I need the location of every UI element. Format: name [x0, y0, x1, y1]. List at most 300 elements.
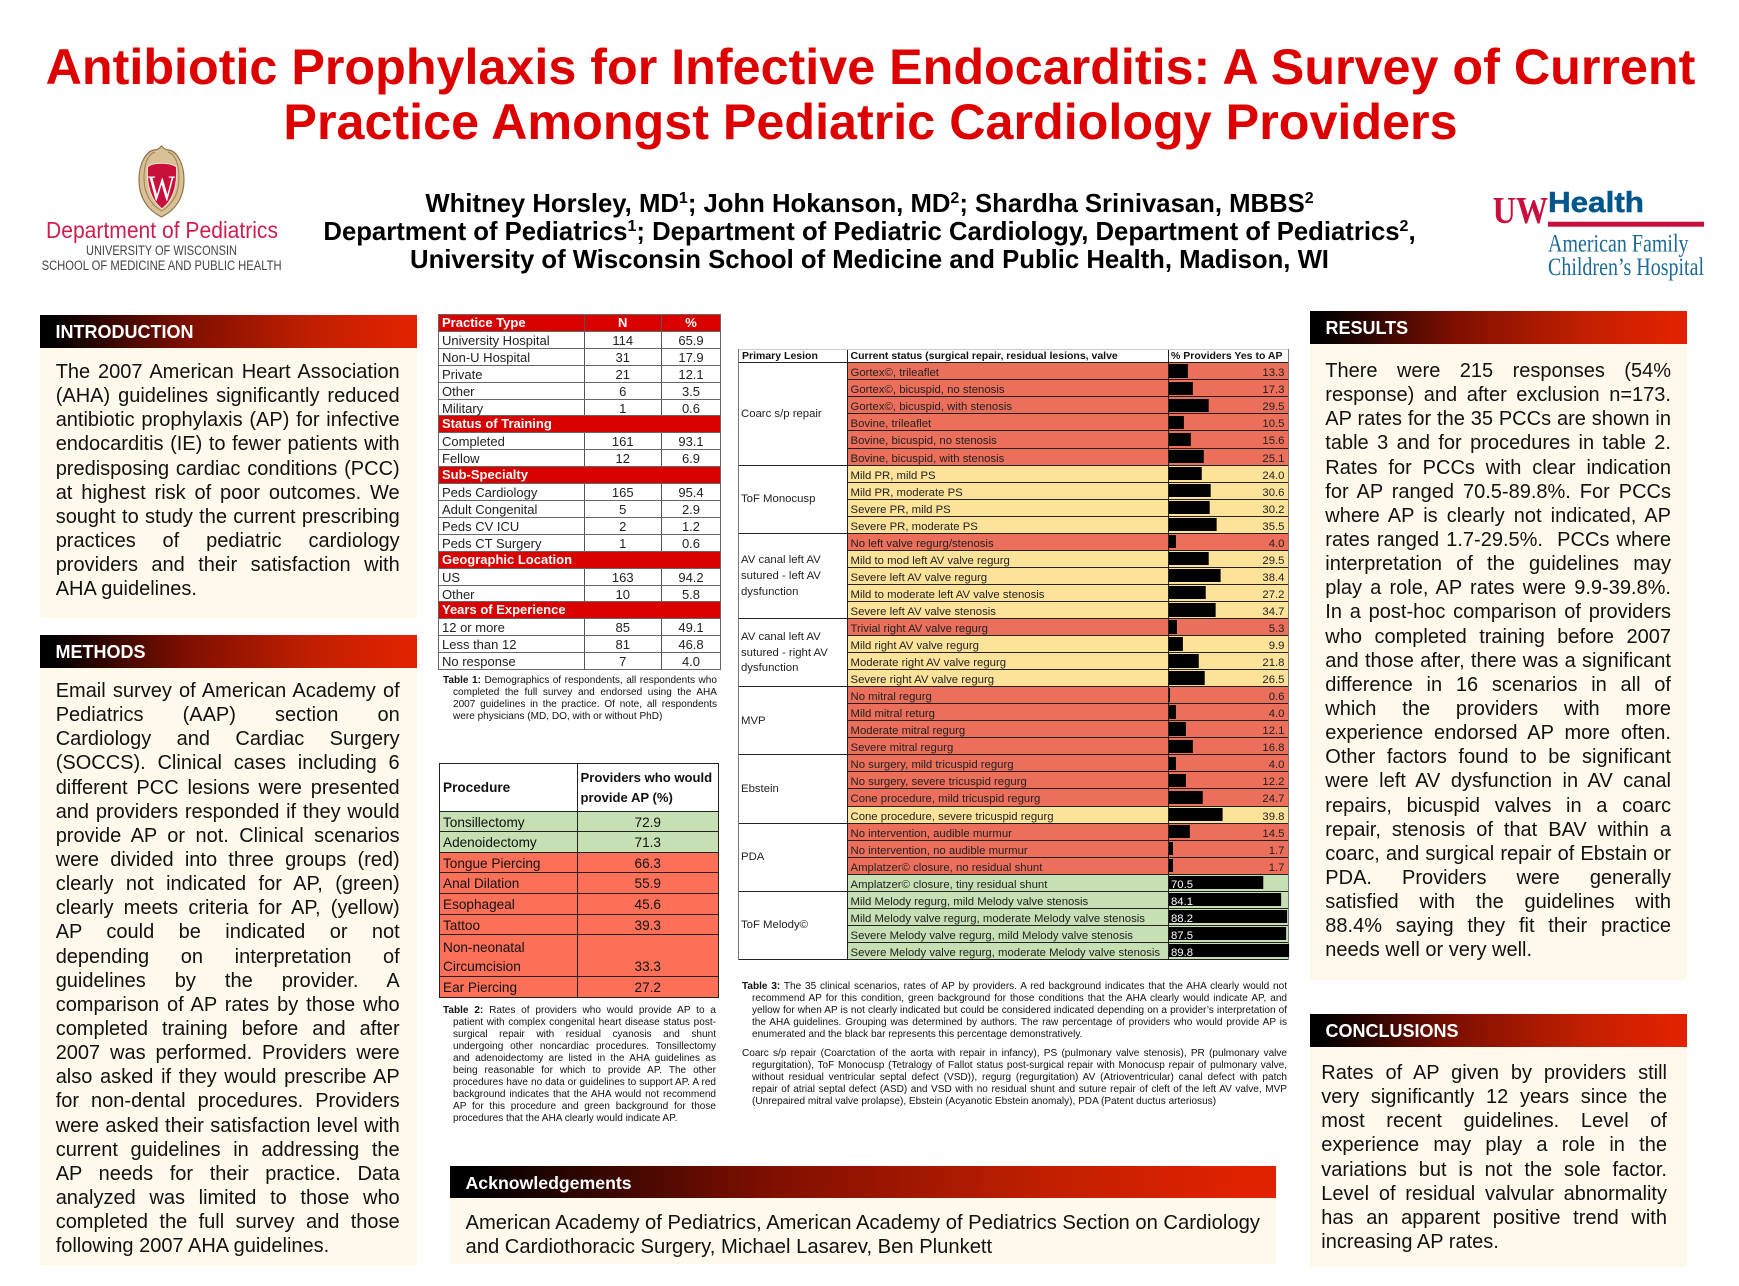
- table 3 abbreviations: repair of atrial septal defect (ASD) and VSD with no residual shunt and suture repair of cleft of the left AV valve, MVP: [752, 1084, 1287, 1095]
- section row: geographic location: [439, 552, 720, 569]
- section row: years of experience: Years of Experience: [442, 602, 566, 617]
- text: results: satisfied with the guidelines with: [1325, 891, 1671, 913]
- section row: years of experience: [439, 602, 720, 619]
- text: introduction: providers and their satisfaction with: [56, 554, 400, 576]
- panel: introduction: [40, 315, 417, 618]
- text: methods: clearly meets criteria for AP, (yellow): [56, 897, 400, 919]
- text: methods: also asked if they would prescribe AP: [56, 1066, 400, 1088]
- table 1: demographics: Peds CV ICU: [442, 519, 519, 534]
- text: methods: for non-dental procedures. Providers: [56, 1090, 400, 1112]
- table 1: demographics: 21: [616, 367, 630, 382]
- group: ToF Monocusp: Severe PR, moderate PS: [850, 521, 978, 533]
- text: methods: [56, 680, 400, 1257]
- text: results: were left AV dysfunction in AV canal: [1325, 770, 1671, 792]
- group: PDA: No intervention, audible murmur: [850, 828, 1012, 840]
- group: Ebstein: 4.0: [1269, 759, 1284, 771]
- title: Practice Amongst Pediatric Cardiology Providers: [283, 93, 1458, 150]
- logo: department of pediatrics: [42, 145, 282, 273]
- table 1: demographics: 1: [619, 401, 626, 416]
- text: conclusions: experience may play a role in the: [1321, 1134, 1667, 1156]
- group: AV canal left AV dysfunction: 29.5: [1262, 555, 1284, 567]
- group: ToF Melody: 89.8: [1171, 947, 1193, 959]
- text: results: [1325, 360, 1671, 961]
- table 1: demographics: 5: [619, 502, 626, 517]
- group: ToF Monocusp: [739, 466, 1288, 534]
- table 1: demographics: Other: [442, 384, 475, 399]
- table 1: demographics: 12.1: [678, 367, 704, 382]
- text: introduction: practices of pediatric cardiology: [56, 530, 400, 552]
- group: ToF Melody: 87.5: [1171, 930, 1193, 942]
- table 1: demographics: US: [442, 570, 460, 585]
- text: results: interpretation of the guidelines may: [1325, 553, 1671, 575]
- table 2 caption: Table 2: Rates of providers who would provide AP to a: [443, 1005, 716, 1016]
- text: results: AP rates for the 35 PCCs are shown in: [1325, 408, 1671, 430]
- text: results: response) and after exclusion n=173.: [1325, 384, 1671, 406]
- text: results: coarc, and surgical repair of Ebstain or: [1325, 843, 1671, 865]
- group: PDA: 1.7: [1269, 862, 1284, 874]
- table 1 header row: [439, 315, 720, 332]
- section row: geographic location: Geographic Location: [442, 552, 572, 567]
- text: methods: different PCC lesions were presented: [56, 777, 400, 799]
- text: methods: 2007 was performed. Providers were: [56, 1042, 400, 1064]
- table 3 header row: Current status (surgical repair, residual lesions, valve: [850, 350, 1118, 362]
- table 1: demographics: 5.8: [682, 586, 700, 602]
- group: Ebstein: Ebstein: [741, 783, 779, 795]
- text: methods: analyzed was limited to those who: [56, 1187, 400, 1209]
- table 3 header row: % Providers Yes to AP: [1171, 350, 1282, 362]
- group: ToF Melody: ToF Melody©: [741, 919, 808, 931]
- text: methods: Email survey of American Academy of: [56, 680, 400, 702]
- text: results: 88.4% saying they fit their practice: [1325, 915, 1671, 937]
- table 3 header row: [739, 349, 1288, 363]
- table 1: demographics: 2.9: [682, 502, 700, 517]
- heading: acknowledgements: Acknowledgements: [466, 1173, 632, 1193]
- group: AV canal right AV dysfunction: 21.8: [1262, 657, 1284, 669]
- text: conclusions: most recent guidelines. Level of: [1321, 1110, 1667, 1132]
- table 3 abbreviations: regurgitation), ToF Monocusp (Tetralogy of Fallot status post-surgical repair with Monocusp repair of pulmonary valve,: [752, 1060, 1287, 1071]
- group: ToF Melody: Severe Melody valve regurg, mild Melody valve stenosis: [850, 930, 1133, 942]
- group: Coarc s/p repair: 25.1: [1262, 453, 1284, 465]
- icon: crest: W: [148, 168, 175, 208]
- table 2: procedures: 33.3: [635, 959, 661, 974]
- group: AV canal right AV dysfunction: 5.3: [1269, 623, 1284, 635]
- table 3 abbreviations: without residual ventricular septal defect (VSD)), regurg (regurgitation) AV (Atrioventricular) canal defect with patch: [752, 1072, 1287, 1083]
- table 2: procedures: 45.6: [635, 897, 661, 912]
- text: introduction: predisposing cardiac conditions (PCC): [56, 458, 400, 480]
- table 1: demographics: 3.5: [682, 384, 700, 399]
- group: Coarc s/p repair: Bovine, trileaflet: [850, 418, 931, 430]
- table 3 caption: yellow for when AP is not clearly indicated but could be considered indicated depending on a provider’s interpretation of: [752, 1005, 1287, 1016]
- text: introduction: endocarditis (IE) to fewer patients with: [56, 433, 400, 455]
- text: introduction: [56, 361, 400, 600]
- group: Coarc s/p repair: Coarc s/p repair: [741, 408, 822, 420]
- group: Coarc s/p repair: 13.3: [1262, 367, 1284, 379]
- group: AV canal left AV dysfunction: 4.0: [1269, 538, 1284, 550]
- table 1 caption: Table 1: Demographics of respondents, all respondents who: [443, 675, 717, 686]
- table 2 header row: [440, 764, 718, 812]
- table 2: procedures: Adenoidectomy: [443, 835, 537, 850]
- text: methods: were asked their satisfaction level with: [56, 1115, 400, 1137]
- text: methods: clearly not indicated for AP, (green): [56, 873, 400, 895]
- heading: methods: METHODS: [56, 642, 146, 662]
- table 3 caption: enumerated and the black bar represents this percentage demonstratively.: [752, 1029, 1082, 1040]
- group: PDA: Amplatzer© closure, no residual shunt: [850, 862, 1042, 874]
- text: results: for AP ranged 70.5-89.8%. For PCCs: [1325, 481, 1671, 503]
- table 1: demographics: Military: [442, 401, 483, 416]
- table 2: procedures: Tattoo: [443, 918, 480, 933]
- group: PDA: No intervention, no audible murmur: [850, 845, 1028, 857]
- title: Antibiotic Prophylaxis for Infective Endocarditis: A Survey of Current: [46, 38, 1695, 95]
- table 2: procedures: [439, 763, 719, 998]
- table 3 caption: Table 3: The 35 clinical scenarios, rates of AP by providers. A red background indicates that the AHA clearly would not: [742, 981, 1287, 992]
- group: AV canal left AV dysfunction: Severe left AV valve stenosis: [850, 606, 996, 618]
- heading: introduction: [40, 315, 417, 348]
- group: AV canal left AV dysfunction: 27.2: [1262, 589, 1284, 601]
- group: Ebstein: No surgery, severe tricuspid regurg: [850, 776, 1027, 788]
- group: Coarc s/p repair: Gortex©, bicuspid, with stenosis: [850, 401, 1012, 413]
- text: results: There were 215 responses (54%: [1325, 360, 1671, 382]
- group: Coarc s/p repair: 10.5: [1262, 418, 1284, 430]
- text: results: In a post-hoc comparison of providers: [1325, 601, 1671, 623]
- group: MVP: 16.8: [1262, 742, 1284, 754]
- table 1: demographics: 10: [616, 586, 630, 602]
- table 1: demographics: 12 or more: [442, 620, 505, 635]
- group: PDA: Amplatzer© closure, tiny residual shunt: [850, 879, 1047, 891]
- group: PDA: [739, 824, 1288, 892]
- text: introduction: antibiotic prophylaxis (AP) for infective: [56, 409, 400, 431]
- table 1: demographics: Less than 12: [442, 637, 516, 652]
- text: methods: provide AP or not. Clinical scenarios: [56, 825, 400, 847]
- group: PDA: 14.5: [1262, 828, 1284, 840]
- heading: results: RESULTS: [1326, 318, 1408, 338]
- table 1: demographics: 12: [616, 451, 630, 466]
- heading: results: [1310, 311, 1687, 344]
- table 2: procedures: Ear Piercing: [443, 980, 517, 995]
- text: methods: AP could be indicated or not: [56, 921, 400, 943]
- group: ToF Melody: Mild Melody valve regurg, moderate Melody valve stenosis: [850, 913, 1145, 925]
- group: Ebstein: Cone procedure, mild tricuspid regurg: [850, 793, 1040, 805]
- table 1: demographics: 93.1: [678, 434, 704, 449]
- table 1: demographics: 1.2: [682, 519, 700, 534]
- group: ToF Melody: 84.1: [1171, 896, 1193, 908]
- group: AV canal left AV dysfunction: 34.7: [1262, 606, 1284, 618]
- group: Coarc s/p repair: Gortex©, trileaflet: [850, 367, 939, 379]
- text: results: PDA. Providers were generally: [1325, 867, 1671, 889]
- table 2 caption: procedures that the AHA clearly would indicate AP.: [453, 1113, 677, 1124]
- group: MVP: Moderate mitral regurg: [850, 725, 965, 737]
- group: Coarc s/p repair: 17.3: [1262, 384, 1284, 396]
- text: methods: Pediatrics (AAP) section on: [56, 704, 400, 726]
- table 1 caption: completed the full survey and endorsed using the AHA: [453, 687, 717, 698]
- text: results: repair, stenosis of that BAV within a: [1325, 819, 1671, 841]
- text: methods: guidelines by the provider. A: [56, 970, 400, 992]
- table 1: demographics: 161: [612, 434, 634, 449]
- group: AV canal right AV dysfunction: Trivial right AV valve regurg: [850, 623, 988, 635]
- text: introduction: The 2007 American Heart Association: [56, 361, 400, 383]
- group: ToF Monocusp: 24.0: [1262, 470, 1284, 482]
- group: ToF Monocusp: Mild PR, mild PS: [850, 470, 936, 482]
- text: results: Other factors found to be significant: [1325, 746, 1671, 768]
- table 2: procedures: 66.3: [635, 856, 661, 870]
- group: ToF Monocusp: ToF Monocusp: [741, 493, 815, 505]
- table 1: demographics: No response: [442, 654, 516, 669]
- group: MVP: [739, 687, 1288, 755]
- section row: status of training: Status of Training: [442, 416, 552, 431]
- group: AV canal left AV dysfunction: No left valve regurg/stenosis: [850, 538, 994, 550]
- group: Coarc s/p repair: [739, 363, 1288, 466]
- text: conclusions: has an apparent positive trend with: [1321, 1207, 1667, 1229]
- section row: sub-specialty: [439, 467, 720, 484]
- table 1: demographics: 85: [616, 620, 630, 635]
- table 2: procedures: 27.2: [635, 980, 661, 995]
- table 1: demographics: 0.6: [682, 401, 700, 416]
- group: ToF Monocusp: Severe PR, mild PS: [850, 504, 951, 516]
- authors and affiliations: Department of Pediatrics1; Department of Pediatric Cardiology, Department of Pediatrics2,: [323, 218, 1416, 246]
- group: AV canal right AV dysfunction: AV canal left AV sutured - right AV dysfunction: [741, 631, 828, 674]
- group: AV canal left AV dysfunction: AV canal left AV sutured - left AV dysfunction: [741, 554, 821, 598]
- table 2: procedures: 55.9: [635, 876, 661, 891]
- group: ToF Melody: 88.2: [1171, 913, 1193, 925]
- group: AV canal left AV dysfunction: Mild to mod left AV valve regurg: [850, 555, 1010, 567]
- text: methods: completed training before and after: [56, 1018, 400, 1040]
- text: methods: completed the full survey and those: [56, 1211, 400, 1233]
- group: AV canal left AV dysfunction: Severe left AV valve regurg: [850, 572, 987, 584]
- group: MVP: 4.0: [1269, 708, 1284, 720]
- heading: methods: [40, 635, 417, 668]
- table 2: procedures: Non-neonatal Circumcision: [443, 940, 525, 974]
- group: AV canal right AV dysfunction: 26.5: [1262, 674, 1284, 686]
- group: Coarc s/p repair: 15.6: [1262, 435, 1284, 447]
- title: [46, 38, 1695, 150]
- table 1: demographics: Adult Congenital: [442, 502, 537, 517]
- group: Ebstein: 24.7: [1262, 793, 1284, 805]
- text: results: and those after, there was a significant: [1325, 650, 1671, 672]
- table 2: procedures: 39.3: [635, 918, 661, 933]
- text: conclusions: Rates of AP given by providers still: [1321, 1062, 1667, 1084]
- table 1: demographics: Peds Cardiology: [442, 485, 537, 500]
- table 2 caption: procedures have no data or guidelines to support AP. A red: [453, 1077, 716, 1088]
- table 1: demographics: 7: [619, 654, 626, 669]
- text: acknowledgements: and Cardiothoracic Surgery, Michael Lasarev, Ben Plunkett: [466, 1236, 992, 1258]
- text: results: which the providers with more: [1325, 698, 1671, 720]
- group: PDA: 1.7: [1269, 845, 1284, 857]
- table 1: demographics: 49.1: [678, 620, 704, 635]
- section row: status of training: [439, 416, 720, 433]
- table 3 abbreviations: (Unrepaired mitral valve prolapse), Ebstein (Acyanotic Ebstein anomaly), PDA (Patent ductus arteriosus): [752, 1096, 1216, 1107]
- table 1 caption: were physicians (MD, DO, with or without PhD): [453, 711, 662, 722]
- table 1: demographics: 163: [612, 570, 634, 585]
- table 2: procedures: 72.9: [635, 814, 661, 830]
- table 1: demographics: 65.9: [678, 333, 704, 348]
- text: methods: current guidelines in addressing the: [56, 1139, 400, 1161]
- group: PDA: PDA: [741, 851, 764, 863]
- text: introduction: sought to study the current prescribing: [56, 506, 400, 528]
- group: MVP: Mild mitral returg: [850, 708, 935, 720]
- text: results: table 3 and for procedures in table 2.: [1325, 432, 1671, 454]
- group: MVP: 12.1: [1262, 725, 1284, 737]
- group: Coarc s/p repair: Gortex©, bicuspid, no stenosis: [850, 384, 1005, 396]
- group: AV canal right AV dysfunction: 9.9: [1269, 640, 1284, 652]
- table 1: demographics: 1: [619, 536, 626, 551]
- text: methods: depending on interpretation of: [56, 946, 400, 968]
- group: Coarc s/p repair: 29.5: [1262, 401, 1284, 413]
- table 1: demographics: University Hospital: [442, 333, 550, 348]
- table 1: demographics: 6: [619, 384, 626, 399]
- authors and affiliations: Whitney Horsley, MD1; John Hokanson, MD2; Shardha Srinivasan, MBBS2: [425, 190, 1314, 218]
- group: MVP: 0.6: [1269, 691, 1284, 703]
- text: results: difference in 16 scenarios in all of: [1325, 674, 1671, 696]
- group: AV canal left AV dysfunction: Mild to moderate left AV valve stenosis: [850, 589, 1044, 601]
- group: MVP: Severe mitral regurg: [850, 742, 953, 754]
- red rule: [1548, 222, 1704, 227]
- table 1 header row: Practice Type: [442, 315, 526, 330]
- authors and affiliations: [323, 190, 1416, 274]
- table 1: demographics: 4.0: [682, 654, 700, 669]
- table 1: demographics: Completed: [442, 434, 505, 449]
- group: AV canal right AV dysfunction: Mild right AV valve regurg: [850, 640, 979, 652]
- table 1: demographics: Non-U Hospital: [442, 350, 530, 365]
- table 3 caption: recommend AP for this condition, green background for those conditions that the AHA clearly would indicate AP, and: [752, 993, 1287, 1004]
- group: ToF Melody: [739, 892, 1288, 960]
- group: ToF Monocusp: Mild PR, moderate PS: [850, 487, 963, 499]
- group: AV canal right AV dysfunction: [739, 619, 1288, 687]
- table 1: demographics: 95.4: [678, 485, 704, 500]
- group: Ebstein: 39.8: [1262, 811, 1284, 823]
- table 3 abbreviations: Coarc s/p repair (Coarctation of the aorta with repair in infancy), PS (pulmonary valve stenosis), PR (pulmonary valve: [742, 1048, 1287, 1059]
- group: MVP: MVP: [741, 715, 766, 727]
- text: methods: Cardiology and Cardiac Surgery: [56, 728, 400, 750]
- table 1: demographics: 165: [612, 485, 634, 500]
- text: conclusions: increasing AP rates.: [1321, 1231, 1499, 1253]
- group: Ebstein: 12.2: [1262, 776, 1284, 788]
- table 2 header row: Procedure: [443, 780, 510, 795]
- text: results: needs well or very well.: [1325, 939, 1532, 961]
- group: MVP: No mitral regurg: [850, 691, 932, 703]
- text: methods: were divided into three groups (red): [56, 849, 400, 871]
- group: ToF Monocusp: 30.6: [1262, 487, 1284, 499]
- table 3 caption: [742, 981, 1288, 1040]
- group: ToF Melody: Mild Melody regurg, mild Melody valve stenosis: [850, 896, 1088, 908]
- table 2 caption: [443, 1005, 716, 1124]
- heading: conclusions: CONCLUSIONS: [1326, 1021, 1459, 1041]
- table 1 caption: [443, 675, 717, 722]
- panel: conclusions: [1310, 1014, 1687, 1267]
- table 3 caption: the AHA guidelines. Grouping was determined by authors. The raw percentage of providers who would provide AP is: [752, 1017, 1287, 1028]
- table 1: demographics: Other: [442, 586, 475, 602]
- section row: sub-specialty: Sub-Specialty: [442, 467, 528, 482]
- text: acknowledgements: [466, 1212, 1260, 1258]
- heading: acknowledgements: [450, 1166, 1276, 1198]
- table 1 header row: %: [685, 315, 697, 330]
- table 2: procedures: Anal Dilation: [443, 876, 519, 891]
- table 2: procedures: Tonsillectomy: [443, 814, 525, 830]
- table 3: clinical scenarios: [738, 349, 1289, 960]
- table 1: demographics: 114: [612, 333, 633, 348]
- icon: crest: [139, 146, 184, 217]
- university name: UNIVERSITY OF WISCONSIN: [86, 243, 237, 258]
- group: Ebstein: No surgery, mild tricuspid regurg: [850, 759, 1014, 771]
- group: Ebstein: Cone procedure, severe tricuspid regurg: [850, 811, 1054, 823]
- table 3 header row: Primary Lesion: [742, 350, 818, 362]
- table 1 header row: N: [618, 315, 627, 330]
- group: AV canal left AV dysfunction: 38.4: [1262, 572, 1284, 584]
- authors and affiliations: University of Wisconsin School of Medicine and Public Health, Madison, WI: [410, 246, 1329, 274]
- group: Coarc s/p repair: Bovine, bicuspid, with stenosis: [850, 453, 1004, 465]
- table 1: demographics: [438, 314, 721, 670]
- table 1: demographics: 81: [616, 637, 630, 652]
- UW mark: UW: [1493, 190, 1548, 232]
- text: methods: and providers responded if they would: [56, 801, 400, 823]
- text: acknowledgements: American Academy of Pediatrics, American Academy of Pediatrics Section on Cardiology: [466, 1212, 1260, 1234]
- table 2 caption: undergoing other noncardiac procedures. Tonsillectomy: [453, 1041, 716, 1052]
- text: methods: AP needs for their practice. Data: [56, 1163, 400, 1185]
- table 2 header row: Providers who would provide AP (%): [580, 770, 712, 805]
- text: results: Rates for PCCs with clear indication: [1325, 457, 1671, 479]
- table 1: demographics: 0.6: [682, 536, 700, 551]
- group: PDA: 70.5: [1171, 879, 1193, 891]
- text: introduction: at highest risk of poor outcomes. We: [56, 482, 400, 504]
- table 2: procedures: Tongue Piercing: [443, 856, 540, 870]
- text: conclusions: [1321, 1062, 1667, 1253]
- logo: UW Health: [1493, 187, 1704, 281]
- group: ToF Monocusp: 30.2: [1262, 504, 1284, 516]
- table 2 caption: surgical repair with residual cyanosis and shunt: [453, 1029, 716, 1040]
- table 1 caption: 2007 guidelines in the practice. Of note, all respondents: [453, 699, 717, 710]
- table 1: demographics: 94.2: [678, 570, 704, 585]
- table 3 abbreviations: [742, 1048, 1287, 1107]
- text: results: experience endorsed AP more often.: [1325, 722, 1671, 744]
- table 1: demographics: 31: [616, 350, 630, 365]
- panel: results: [1310, 311, 1687, 980]
- text: methods: following 2007 AHA guidelines.: [56, 1235, 329, 1257]
- table 2 caption: background indicates that the AHA would not recommend: [453, 1089, 716, 1100]
- table 1: demographics: 6.9: [682, 451, 700, 466]
- department name: Department of Pediatrics: [46, 217, 278, 243]
- table 1: demographics: 17.9: [678, 350, 704, 365]
- text: results: repairs, bicuspid valves in a coarc: [1325, 795, 1671, 817]
- table 1: demographics: Peds CT Surgery: [442, 536, 541, 551]
- Health word: Health: [1548, 187, 1644, 219]
- heading: conclusions: [1310, 1014, 1687, 1047]
- group: ToF Melody: Severe Melody valve regurg, moderate Melody valve stenosis: [850, 947, 1160, 959]
- heading: introduction: INTRODUCTION: [56, 322, 194, 342]
- table 2: procedures: 71.3: [635, 835, 661, 850]
- table 1: demographics: 46.8: [678, 637, 704, 652]
- text: results: rates ranged 1.7-29.5%. PCCs where: [1325, 529, 1671, 551]
- group: AV canal right AV dysfunction: Severe right AV valve regurg: [850, 674, 994, 686]
- text: introduction: (AHA) guidelines significantly reduced: [56, 385, 400, 407]
- group: Coarc s/p repair: Bovine, bicuspid, no stenosis: [850, 435, 997, 447]
- group: Ebstein: [739, 755, 1288, 824]
- group: AV canal left AV dysfunction: [739, 534, 1288, 619]
- text: methods: comparison of AP rates by those who: [56, 994, 400, 1016]
- text: introduction: AHA guidelines.: [56, 578, 197, 600]
- text: results: where AP is clearly not indicated, AP: [1325, 505, 1671, 527]
- text: methods: (SOCCS). Clinical cases including 6: [56, 752, 400, 774]
- table 2 caption: patient with complex congenital heart disease status post-: [453, 1017, 716, 1028]
- text: conclusions: very significantly 12 years since the: [1321, 1086, 1667, 1108]
- table 1: demographics: Fellow: [442, 451, 480, 466]
- text: conclusions: Level of residual valvular abnormality: [1321, 1183, 1667, 1205]
- table 2: procedures: Esophageal: [443, 897, 515, 912]
- table 2 caption: and adenoidectomy are listed in the AHA guidelines as: [453, 1053, 716, 1064]
- table 2 caption: being reasonable for which to provide AP. The other: [453, 1065, 716, 1076]
- group: AV canal right AV dysfunction: Moderate right AV valve regurg: [850, 657, 1006, 669]
- table 1: demographics: Private: [442, 367, 482, 382]
- panel: acknowledgements: [450, 1166, 1276, 1264]
- text: results: who completed training before 2007: [1325, 626, 1671, 648]
- text: results: play a role, AP rates were 9.9-39.8%.: [1325, 577, 1671, 599]
